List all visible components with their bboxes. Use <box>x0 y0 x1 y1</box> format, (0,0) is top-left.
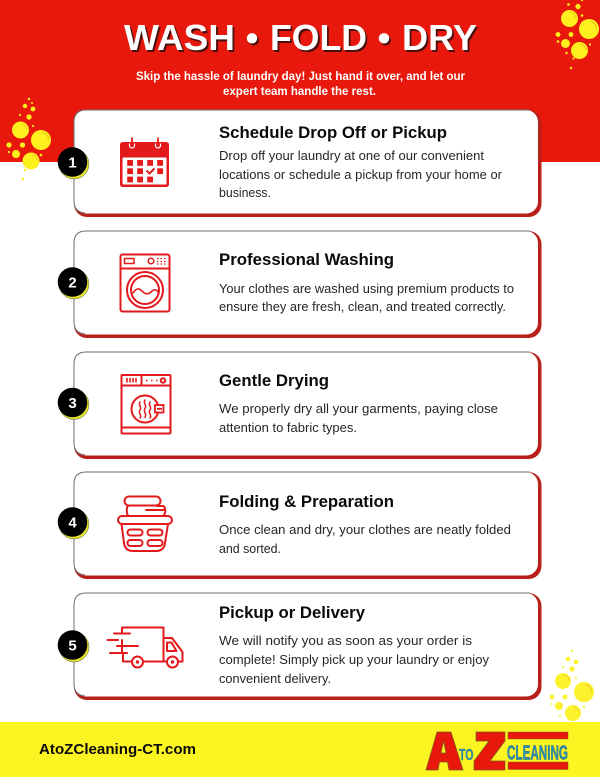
step 3 heading: Gentle Drying <box>219 372 329 390</box>
title: • <box>378 17 390 58</box>
panel: step 2 <box>74 231 542 338</box>
step 1 description: locations or schedule a pickup from your home or <box>219 167 503 182</box>
icon: calendar <box>120 138 169 187</box>
number badge 3 <box>58 388 89 420</box>
header red band <box>0 0 600 162</box>
title: • <box>246 17 258 58</box>
title: WASH <box>126 19 237 60</box>
step 1 description: Drop off your laundry at one of our convenient <box>219 148 484 163</box>
step 4 heading: Folding & Preparation <box>219 493 394 511</box>
number badge 5 <box>58 630 89 662</box>
subtitle: Skip the hassle of laundry day! Just hand it over, and let our <box>136 69 465 83</box>
step 4 description: and sorted. <box>219 541 281 556</box>
panel: step 4 <box>74 472 542 579</box>
step 2 description: Your clothes are washed using premium products to <box>219 281 514 296</box>
bubbles: bottom right <box>550 650 594 721</box>
logo: A to Z Cleaning: TO <box>459 747 474 764</box>
panel: step 1 <box>74 110 542 217</box>
panel: step 3 <box>74 352 542 459</box>
step 5 description <box>219 633 489 686</box>
title <box>124 17 479 60</box>
step 5 description: convenient delivery. <box>219 671 331 686</box>
bubbles: top right <box>556 0 599 69</box>
icon: dryer <box>122 375 170 434</box>
step 4 description <box>219 522 511 556</box>
step 5 heading: Pickup or Delivery <box>219 604 366 622</box>
icon: delivery truck <box>108 628 182 668</box>
title: DRY <box>402 17 477 58</box>
logo: A to Z Cleaning <box>426 732 568 770</box>
icon: washing machine <box>120 254 170 312</box>
step 4 description: Once clean and dry, your clothes are neatly folded <box>219 522 511 537</box>
step 1 heading: Schedule Drop Off or Pickup <box>219 124 447 142</box>
title: DRY <box>404 19 479 60</box>
step 2 description: ensure they are fresh, clean, and treated correctly. <box>219 299 506 314</box>
panel: step 5 <box>74 593 542 700</box>
number badge 2 <box>58 267 89 299</box>
step 3 description <box>219 401 498 435</box>
step 1 description <box>219 148 503 200</box>
step 3 description: attention to fabric types. <box>219 420 357 435</box>
title: WASH <box>124 17 235 58</box>
number badge 2: 2 <box>68 274 77 292</box>
number badge 3: 3 <box>68 395 77 412</box>
number badge 4: 4 <box>68 514 77 532</box>
subtitle: expert team handle the rest. <box>223 84 376 98</box>
title: FOLD <box>272 19 369 60</box>
icon: laundry basket <box>118 496 172 551</box>
step 3 description: We properly dry all your garments, paying close <box>219 401 498 416</box>
step 2 description <box>219 281 514 314</box>
footer yellow band <box>0 722 600 777</box>
number badge 1: 1 <box>68 154 77 172</box>
step 1 description: business. <box>219 185 271 200</box>
website url: AtoZCleaning-CT.com <box>39 741 196 758</box>
title: FOLD <box>270 17 367 58</box>
bubbles: top left <box>6 98 51 180</box>
step 5 description: We will notify you as soon as your order is <box>219 633 473 648</box>
number badge 5: 5 <box>68 638 77 654</box>
step 2 heading: Professional Washing <box>219 251 394 269</box>
title: • <box>247 19 260 60</box>
subtitle <box>136 69 465 98</box>
number badge 1 <box>58 147 89 179</box>
step 5 description: complete! Simply pick up your laundry or enjoy <box>219 652 489 667</box>
title: • <box>379 19 392 60</box>
number badge 4 <box>58 507 89 539</box>
